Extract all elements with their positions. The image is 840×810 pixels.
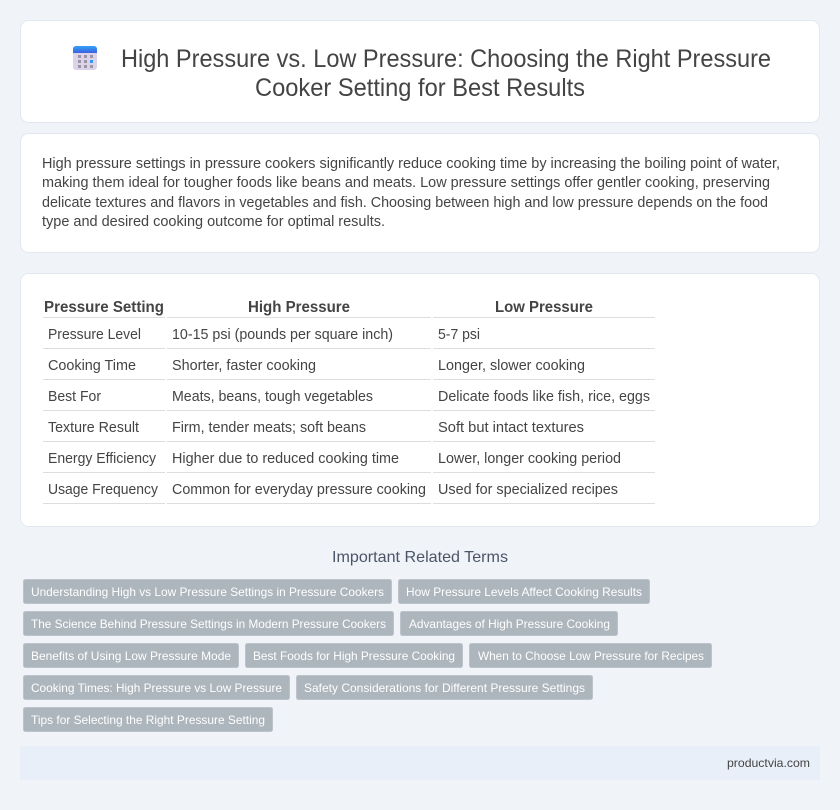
tag [24,580,392,604]
intro text: type and desired cooking outcome for optimal results. [42,214,385,230]
row: usage frequency [43,482,655,504]
tag: Benefits of Using Low Pressure Mode [31,649,231,663]
row: cooking time [43,358,655,380]
row: best for: Meats, beans, tough vegetables [172,389,373,405]
intro text: making them ideal for tougher foods like beans and meats. Low pressure settings offer gentler cooking, preserving [42,175,770,191]
row: pressure level [43,327,655,349]
heading: important related terms: Important Related Terms [332,549,508,566]
tag: Cooking Times: High Pressure vs Low Pressure [31,681,282,695]
row: pressure level: 10-15 psi (pounds per square inch) [172,327,393,343]
panel: comparison table [20,274,820,526]
tag: Safety Considerations for Different Pressure Settings [304,681,585,695]
icon: calendar [73,46,97,70]
tag: The Science Behind Pressure Settings in Modern Pressure Cookers [31,617,386,631]
tag: Tips for Selecting the Right Pressure Setting [31,713,265,727]
row: energy efficiency: Lower, longer cooking period [438,451,621,467]
table header row [43,299,655,318]
tag [400,612,618,636]
tag [24,612,394,636]
row: texture result: Soft but intact textures [438,420,584,436]
tag: When to Choose Low Pressure for Recipes [478,649,704,663]
title: High Pressure vs. Low Pressure: Choosing the Right Pressure [121,45,771,73]
row: cooking time: Cooking Time [48,358,136,374]
tag [24,644,238,668]
row: energy efficiency: Energy Efficiency [48,451,157,467]
tag [398,580,650,604]
table header row: High Pressure [248,299,350,316]
row: cooking time: Longer, slower cooking [438,358,585,374]
row: best for [43,389,655,411]
row: usage frequency: Usage Frequency [48,482,159,498]
row: energy efficiency [43,451,655,473]
tag [470,644,712,668]
row: best for: Best For [48,389,101,405]
title: Cooker Setting for Best Results [255,74,585,102]
tag [296,676,592,700]
intro text: High pressure settings in pressure cookers significantly reduce cooking time by increasing the boiling point of water, [42,156,780,172]
row: pressure level: 5-7 psi [438,327,480,343]
row: texture result: Texture Result [48,420,139,436]
panel: intro paragraph [20,134,820,252]
tag: Advantages of High Pressure Cooking [409,617,610,631]
table header row: Low Pressure [495,299,593,316]
row: best for: Delicate foods like fish, rice, eggs [438,389,650,405]
related terms tags [24,580,712,732]
row: texture result [43,420,655,442]
row: usage frequency: Common for everyday pressure cooking [172,482,426,498]
row: usage frequency: Used for specialized recipes [438,482,618,498]
tag [24,708,272,732]
row: pressure level: Pressure Level [48,327,141,343]
tag [246,644,462,668]
footer bar [20,746,820,780]
row: cooking time: Shorter, faster cooking [172,358,316,374]
row: energy efficiency: Higher due to reduced cooking time [172,451,399,467]
tag: Best Foods for High Pressure Cooking [253,649,455,663]
intro text: delicate textures and flavors in vegetables and fish. Choosing between high and low pressure depends on the food [42,195,768,211]
footer source: productvia.com [727,756,810,770]
panel: title header [20,20,820,122]
tag: How Pressure Levels Affect Cooking Results [406,585,642,599]
tag [24,676,290,700]
tag: Understanding High vs Low Pressure Settings in Pressure Cookers [31,585,384,599]
table header row: Pressure Setting [44,299,164,316]
row: texture result: Firm, tender meats; soft beans [172,420,366,436]
